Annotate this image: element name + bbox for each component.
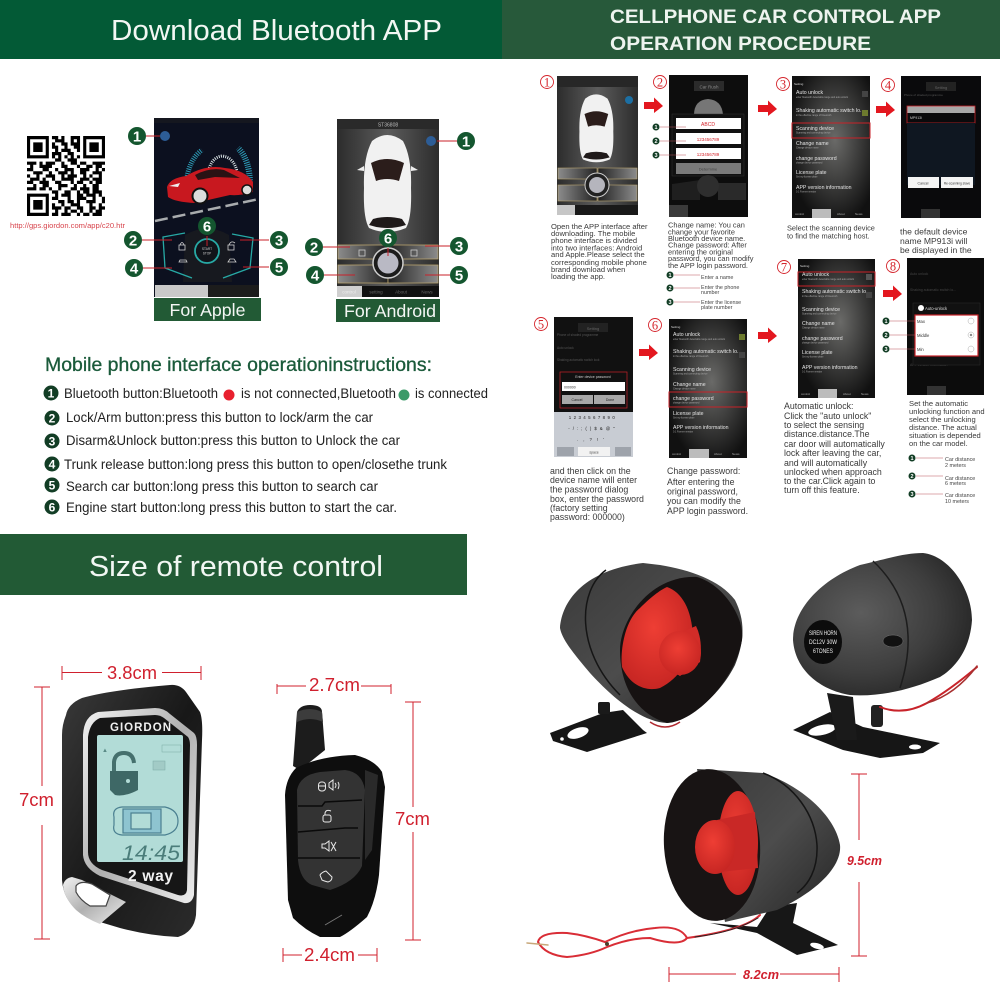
text: step 7: turn off this feature.	[784, 485, 860, 495]
step 6: settings screen, change password: enter bluetooth detectable range and auto unlock	[673, 338, 726, 341]
step 3: settings screen, scanning device: in the effective range of bluetooth	[796, 114, 832, 117]
arrow: step 2 to 3	[758, 100, 777, 116]
step 6: settings screen, change password: change password	[673, 396, 714, 402]
step 3: settings screen, scanning device: Scanning device	[796, 126, 834, 132]
panel: Android phone screen: News	[421, 290, 433, 294]
step 6: settings screen, change password	[669, 319, 747, 458]
step 8: unlock distance screen: Middle	[917, 333, 930, 338]
label: For Apple	[154, 298, 261, 321]
step 6: settings screen, change password: About	[714, 452, 722, 456]
step 8: unlock distance screen: Max	[917, 319, 926, 324]
dimensions: speaker sizes	[669, 774, 882, 982]
step 7: settings screen, auto unlock: Scanning device	[802, 307, 840, 313]
dimensions: remote sizes: 7cm	[19, 790, 54, 810]
step 3: settings screen, scanning device	[792, 76, 870, 218]
text: step 6: APP login password.	[667, 506, 748, 516]
callouts: numbered markers for the phones: 5	[455, 268, 463, 284]
text: step 7: distance.distance.The	[784, 429, 870, 439]
icon: white car top view	[357, 135, 418, 232]
icon: open padlock	[110, 753, 138, 795]
instructions list: is connected	[415, 386, 488, 401]
panel: Android phone screen: control	[342, 290, 356, 294]
dimensions: speaker sizes: 9.5cm	[847, 853, 882, 868]
step 2: change name screen: 123456789	[697, 137, 720, 142]
text: step 7: unlocked when approach	[784, 467, 882, 477]
step 3: settings screen, scanning device: Setting	[794, 82, 804, 86]
label: siren horn: DC12V 30W	[809, 639, 838, 646]
text: step 1: into two interfaces: Android	[551, 244, 642, 252]
text: step 7: to select the sensing	[784, 420, 864, 430]
LCD clock: 14:45	[122, 842, 180, 865]
step 7: settings screen, auto unlock: Change name	[802, 321, 835, 327]
step 6: settings screen, change password: 0.1 Former version	[673, 430, 694, 434]
marker: step 6: 6	[652, 318, 658, 332]
step 5: device password screen: Auto unlock	[557, 346, 574, 350]
LCD screen	[97, 735, 183, 862]
step 3: settings screen, scanning device: News	[855, 212, 863, 216]
control panel	[183, 228, 232, 282]
numbered option markers	[882, 318, 915, 353]
step 3: settings screen, scanning device: Change name	[796, 141, 829, 147]
text: step 7: Automatic unlock:	[784, 401, 853, 411]
step 3: settings screen, scanning device: License plate	[796, 170, 827, 176]
step 6: settings screen, change password: Shaking automatic switch lo...	[673, 349, 741, 355]
dimensions: remote sizes: 7cm	[395, 809, 430, 829]
text: step 8: distance. The actual	[909, 423, 977, 432]
callouts: numbered markers for the phones: 4	[130, 260, 139, 278]
text: step 1: phone interface is divided	[551, 236, 637, 245]
text: step 7: to the car.Click again to	[784, 476, 876, 486]
step 7: settings screen, auto unlock: License plate	[802, 350, 833, 356]
icon: car on LCD	[114, 807, 178, 835]
step 5: device password screen: -/:;()$&@"	[568, 426, 618, 431]
step 3: settings screen, scanning device: change device password	[796, 162, 823, 164]
arrow: step 6 to 7	[758, 328, 777, 343]
step 7: settings screen, auto unlock: enter bluetooth detectable range and auto unlock	[802, 278, 855, 281]
header: Download Bluetooth APP	[0, 0, 502, 59]
instructions list: Search car button:long press this button to search car	[66, 479, 378, 494]
text: step 6: you can modify the	[667, 496, 741, 506]
step 6: settings screen, change password: APP version information	[673, 425, 729, 431]
legend: step 8: Car distance	[945, 476, 975, 482]
label: siren horn	[804, 620, 842, 664]
step 3: settings screen, scanning device: enter bluetooth detectable range and auto unlock	[796, 96, 849, 99]
step 8: unlock distance screen: 8	[890, 260, 896, 274]
step 2: change name screen: Car Rush	[699, 84, 719, 90]
instructions list: Trunk release button:long press this button to open/closethe trunk	[64, 457, 447, 472]
text: step 2: Change name: You can	[668, 220, 745, 230]
panel: Android phone screen: About	[395, 290, 408, 294]
step 7: settings screen, auto unlock: change device password	[802, 342, 829, 344]
text: step 6: original password,	[667, 486, 738, 496]
instructions list: 3	[49, 434, 56, 448]
step 6: settings screen, change password: Change device name	[673, 388, 696, 390]
callouts: numbered markers for the phones: 2	[129, 232, 137, 250]
text: step 3: Select the scanning device	[787, 224, 875, 232]
text: step 5: the password dialog	[550, 484, 628, 494]
step 7: settings screen, auto unlock	[798, 259, 875, 398]
arrow: step 3 to 4	[876, 102, 895, 117]
text: step 2: password, you can modify	[668, 254, 754, 263]
text: step 7: and will automatically	[784, 458, 868, 468]
step 5: device password screen: 1234567890	[569, 415, 617, 420]
legend: step 2: 2	[668, 286, 672, 292]
legend: step 8: 3	[910, 492, 914, 498]
header: cellphone car control app operation procedure: CELLPHONE CAR CONTROL APP	[610, 6, 941, 28]
speaker: front view with wires	[527, 766, 840, 957]
instructions list: Lock/Arm button:press this button to lock/arm the car	[66, 410, 373, 425]
step 5: device password screen: Enter device password	[575, 375, 611, 379]
text: step 3: to find the matching host.	[787, 232, 870, 240]
text: step 2: Bluetooth device name.	[668, 234, 745, 243]
arrow: step 7 to 8	[883, 286, 902, 301]
step 3: settings screen, scanning device: APP version information	[796, 185, 852, 191]
step 2: change name screen: Determine	[699, 166, 718, 172]
step 1: app home screen	[540, 76, 638, 215]
step 2: change name screen: 123456789	[697, 152, 720, 157]
step 5: device password screen: 000000	[564, 386, 576, 390]
instructions list: 1	[48, 386, 55, 400]
callouts: numbered markers for the phones: 6	[384, 230, 392, 248]
instructions list: Disarm&Unlock button:press this button to Unlock the car	[66, 433, 400, 448]
callouts: numbered markers for the phones: 1	[133, 128, 141, 146]
legend: step 8: 6 meters	[945, 481, 966, 487]
QR url: http://gps.giordon.com/app/c20.htr	[10, 221, 125, 230]
text: step 1: loading the app.	[551, 272, 605, 281]
text: step 8: select the unlocking	[909, 415, 976, 424]
step 3: settings screen, scanning device: Scanning and connecting device	[796, 132, 831, 134]
callouts: numbered markers for the phones: 1	[462, 134, 470, 150]
text: step 8: Set the automatic	[909, 399, 968, 408]
text: step 5: (factory setting	[550, 503, 608, 513]
callouts: numbered markers for the phones: 3	[275, 232, 283, 250]
wires	[527, 915, 760, 957]
text: step 7: car door will automatically	[784, 439, 885, 449]
text: step 4: the default device	[900, 226, 968, 236]
step 5: device password screen: Done	[606, 398, 614, 402]
step 1: app home screen: 1	[544, 76, 550, 90]
step 3: settings screen, scanning device: 0.1 Former version	[796, 190, 817, 194]
step 7: settings screen, auto unlock: Auto unlock	[802, 272, 830, 278]
legend: step 8: 10 meters	[945, 499, 969, 505]
dimensions: speaker sizes: 8.2cm	[743, 967, 779, 982]
step 3: settings screen, scanning device: Shaking automatic switch lo...	[796, 108, 864, 114]
numbered option markers: 3	[884, 347, 888, 353]
legend: step 2: Enter the phone	[701, 285, 739, 291]
instructions list: 2	[49, 412, 56, 426]
step 6: settings screen, change password: Scanning device	[673, 367, 711, 373]
step 7: settings screen, auto unlock: APP version information	[802, 365, 858, 371]
text: step 2: Change password: After	[668, 240, 747, 250]
instructions list	[44, 386, 488, 515]
instructions list: 5	[49, 478, 56, 492]
control buttons	[338, 245, 388, 259]
step 4: device list screen: Re-scanning slave	[944, 182, 970, 186]
text: step 1: downloading. The mobile	[551, 229, 635, 238]
step 7: settings screen, auto unlock: in the effective range of bluetooth	[802, 295, 838, 298]
step 3: settings screen, scanning device: Change device name	[796, 146, 819, 150]
marker: step 6	[648, 318, 662, 332]
step 7: settings screen, auto unlock: 0.1 Former version	[802, 370, 823, 374]
tab bar	[155, 285, 208, 297]
legend: step 8: 2 meters	[945, 463, 966, 469]
legend: step 2: 3	[668, 300, 672, 306]
legend: step 8: 1	[910, 456, 914, 462]
step 5: device password screen: Cancel	[572, 398, 583, 402]
dimensions: remote sizes: 3.8cm	[107, 663, 157, 683]
text: step 1: and Apple.Please select the	[551, 250, 645, 259]
marker: step 3: 3	[780, 78, 786, 92]
step 7: settings screen, auto unlock: About	[843, 392, 851, 396]
header: Size of remote control: Size of remote control	[89, 551, 383, 583]
numbered form markers	[652, 124, 686, 159]
step 4: device list screen: 4	[885, 78, 892, 92]
step 3: settings screen, scanning device: Auto unlock	[796, 90, 824, 96]
panel: Android phone screen: ST36808	[378, 122, 398, 128]
legend: step 2: Enter the license	[701, 300, 741, 306]
arrow: step 5 to 6	[639, 344, 658, 360]
label: For Apple: For Apple	[170, 300, 246, 320]
numbered form markers: 2	[654, 139, 658, 145]
step 5: device password screen: .,?!'	[577, 437, 609, 442]
text: step 8: on the car model.	[909, 439, 968, 448]
label: 2 way: 2 way	[128, 868, 173, 885]
step 5: device password screen: Setting	[587, 326, 599, 331]
instructions list: Bluetooth button:Bluetooth	[64, 386, 218, 401]
instructions list: 6	[49, 500, 56, 514]
label: siren horn: 6TONES	[813, 648, 834, 655]
step 4: device list screen: Phone of shaded programme	[904, 93, 943, 97]
panel: Android phone screen	[337, 119, 439, 297]
remote: four button key fob	[285, 705, 385, 937]
step 5: device password screen: Shaking automatic switch lock	[557, 358, 600, 362]
text: step 2: entering the original	[668, 248, 733, 256]
legend: step 2: number	[701, 290, 719, 296]
icon: bluetooth status	[160, 131, 170, 141]
heading: interface instructions: Mobile phone interface operationinstructions:	[45, 354, 432, 376]
step 7: settings screen, auto unlock: Shaking automatic switch lo...	[802, 289, 870, 295]
step 7: settings screen, auto unlock: control	[801, 392, 810, 396]
text: step 5: password: 000000)	[550, 512, 625, 522]
text: step 1: Open the APP interface after	[551, 222, 648, 231]
step 3: settings screen, scanning device: About	[837, 212, 845, 216]
step 5: device password screen: space	[589, 450, 599, 454]
numbered option markers: 2	[884, 333, 888, 339]
step 3: settings screen, scanning device: change password	[796, 156, 837, 162]
road dashes	[155, 199, 259, 221]
text: step 5: box, enter the password	[550, 494, 644, 504]
step 8: unlock distance screen: APP version information	[910, 363, 948, 367]
step 6: settings screen, change password: Setting	[671, 325, 681, 329]
step 2: change name screen: ABCD	[701, 122, 715, 128]
QR code	[27, 136, 105, 216]
text: step 8: unlocking function and	[909, 407, 985, 416]
text: step 5: and then click on the	[550, 466, 631, 476]
legend: step 2: Enter a name	[701, 275, 733, 281]
step 4: device list screen: MP913i	[910, 116, 922, 120]
step 6: settings screen, change password: Scanning and connecting device	[673, 372, 708, 376]
step 5: device password screen: Phone of shaded programme	[557, 333, 599, 337]
step 6: settings screen, change password: in the effective range of bluetooth	[673, 355, 709, 358]
callouts: numbered markers for the phones: 5	[275, 260, 283, 276]
step 5: device password screen	[534, 317, 633, 457]
text: step 5: device name will enter	[550, 475, 637, 485]
legend: step 2: 1	[668, 273, 672, 279]
step 7: settings screen, auto unlock: Set my license plate	[802, 356, 824, 358]
text: step 6: Change password:	[667, 466, 740, 476]
panel: Apple phone screen	[154, 118, 259, 297]
step 8: unlock distance screen: Auto unlock	[910, 272, 929, 276]
dimensions: remote sizes	[19, 663, 430, 965]
key ring	[63, 877, 126, 924]
step 6: settings screen, change password: Set my license plate	[673, 416, 695, 420]
step 7: settings screen, auto unlock: Change device name	[802, 326, 825, 330]
text: step 4: name MP913i will	[900, 236, 967, 246]
panel: Apple phone screen: START	[202, 247, 212, 251]
step 6: settings screen, change password: Change name	[673, 382, 706, 388]
step 5: device password screen: 5	[538, 318, 544, 332]
instructions list: 4	[49, 458, 56, 472]
step 6: settings screen, change password: control	[672, 452, 681, 456]
numbered form markers: 3	[654, 153, 658, 159]
dimensions: remote sizes: 2.4cm	[304, 945, 355, 965]
step 4: device list screen: Cancel	[918, 182, 929, 186]
panel: Android phone screen: setting	[369, 290, 383, 294]
step 7: settings screen, auto unlock: News	[861, 392, 869, 396]
dimensions: remote sizes: 2.7cm	[309, 675, 360, 695]
instructions list: is not connected,Bluetooth	[241, 386, 396, 401]
brand: GIORDON	[110, 722, 171, 734]
text: step 1: brand download when	[551, 265, 625, 274]
speaker: rear view with label	[793, 553, 977, 758]
step 7: settings screen, auto unlock: Scanning and connecting device	[802, 312, 837, 316]
text: step 2: the APP login password.	[668, 261, 748, 270]
legend: step 8	[908, 454, 975, 505]
step 8: unlock distance screen: Min	[917, 347, 924, 352]
remote: GIORDON 2 way LCD	[62, 685, 202, 937]
step 6: settings screen, change password: change device password	[673, 402, 700, 404]
legend: step 8: 2	[910, 474, 914, 480]
legend: step 8: Car distance	[945, 493, 975, 499]
numbered form markers: 1	[654, 125, 658, 131]
text: step 4: be displayed in the	[900, 245, 972, 255]
legend: step 2	[666, 272, 741, 311]
step 3: settings screen, scanning device: Set my license plate	[796, 176, 818, 178]
numbered option markers: 1	[884, 319, 888, 325]
step 6: settings screen, change password: Auto unlock	[673, 332, 701, 338]
step 7: settings screen, auto unlock: change password	[802, 336, 843, 342]
marker: step 7: 7	[781, 260, 787, 274]
text: step 7: Click the "auto unlock"	[784, 411, 871, 421]
step 2: change name screen: 2	[657, 76, 663, 90]
step 8: unlock distance screen	[882, 258, 984, 395]
gauges	[186, 148, 250, 190]
header: cellphone car control app operation procedure	[502, 0, 1000, 59]
step 6: settings screen, change password: License plate	[673, 411, 704, 417]
text: step 8: situation is depended	[909, 431, 981, 440]
step 7: settings screen, auto unlock: Setting	[800, 264, 810, 268]
text: step 1: corresponding mobile phone	[551, 258, 647, 267]
label: siren horn: SIREN HORN	[809, 630, 837, 637]
callouts: numbered markers for the phones: 2	[310, 240, 318, 256]
callouts: numbered markers for the phones	[124, 127, 475, 284]
header: Size of remote control	[0, 534, 467, 595]
text: step 2: change your favorite	[668, 228, 735, 236]
legend: step 2: plate number	[701, 305, 733, 311]
step 4: device list screen	[882, 76, 981, 218]
step 4: device list screen: Setting	[935, 85, 947, 90]
step 3: settings screen, scanning device: control	[795, 212, 804, 216]
icon: red car	[167, 167, 253, 204]
instructions list: Engine start button:long press this button to start the car.	[66, 500, 397, 515]
header: cellphone car control app operation procedure: OPERATION PROCEDURE	[610, 33, 871, 55]
header: Download Bluetooth APP: Download Bluetooth APP	[111, 15, 442, 47]
step 8: unlock distance screen: Auto-unlock	[925, 306, 948, 311]
remote: GIORDON 2 way LCD: ▲	[102, 748, 108, 754]
step 8: unlock distance screen: Shaking automatic switch lo...	[910, 288, 956, 292]
marker: step 3	[776, 78, 790, 92]
marker: step 7	[778, 260, 790, 274]
callouts: numbered markers for the phones: 4	[311, 268, 320, 284]
speaker: front left view	[550, 563, 742, 752]
step 6: settings screen, change password: News	[732, 452, 740, 456]
arrow: step 1 to 2	[644, 98, 663, 113]
legend: step 8: Car distance	[945, 457, 975, 463]
callouts: numbered markers for the phones: 6	[203, 218, 211, 236]
tab bar	[337, 286, 439, 297]
button icons	[318, 780, 339, 882]
text: step 6: After entering the	[667, 477, 735, 487]
label: For Android: For Android	[344, 301, 436, 321]
text: step 7: lock after leaving the car,	[784, 448, 881, 458]
icon: bluetooth status	[426, 136, 436, 146]
panel: Apple phone screen: STOP	[203, 252, 211, 256]
step 2: change name screen	[652, 75, 748, 217]
callouts: numbered markers for the phones: 3	[455, 238, 463, 256]
